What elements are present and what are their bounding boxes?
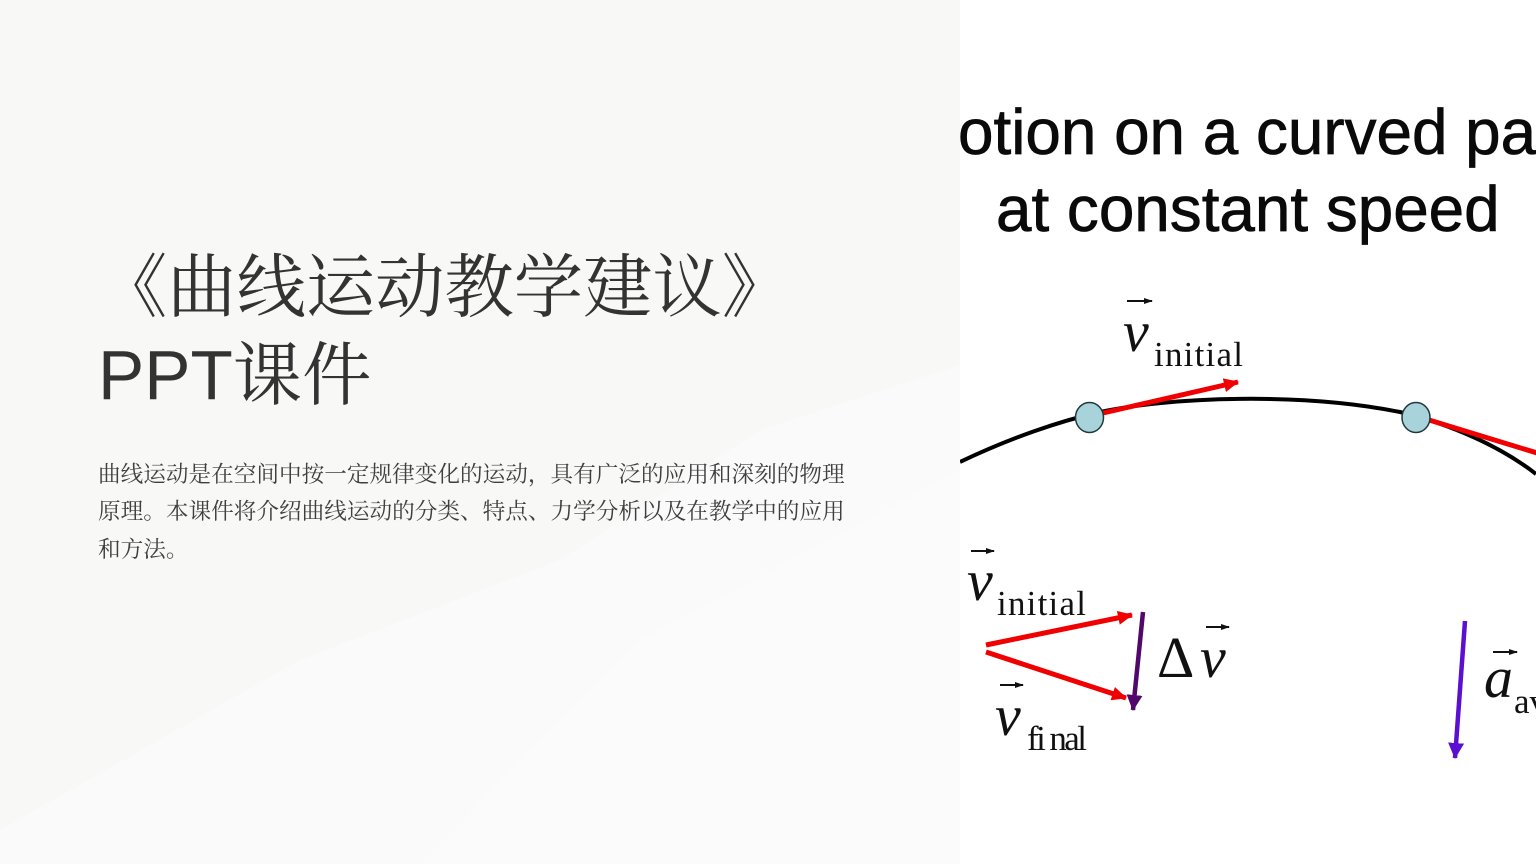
description text: 原理。本课件将介绍曲线运动的分类、特点、力学分析以及在教学中的应用: [98, 499, 845, 524]
label: v final: v: [995, 683, 1021, 748]
label: v initial in triangle: v: [967, 548, 993, 613]
label: a average: a: [1484, 645, 1513, 710]
label: a average: [1484, 645, 1536, 721]
vector triangle: velocity change: [986, 612, 1143, 710]
description text: [98, 462, 845, 562]
label: v initial in triangle: initial: [997, 584, 1086, 623]
label: v initial on path: [1123, 299, 1243, 374]
curved path: [960, 399, 1536, 474]
particle at first position: [1076, 402, 1104, 432]
particle at second position: [1402, 402, 1430, 432]
background: left panel: [0, 0, 960, 864]
label: v initial on path: initial: [1154, 335, 1243, 374]
label: v initial in triangle: [967, 548, 1086, 623]
label: delta v: v: [1200, 625, 1226, 690]
title: PPT课件: [98, 336, 371, 414]
title: [98, 248, 791, 414]
label: v final: fi nal: [1027, 719, 1087, 758]
label: v initial on path: v: [1123, 299, 1149, 364]
description text: 和方法。: [98, 536, 188, 562]
average acceleration arrow: [1455, 621, 1465, 758]
diagram heading: at constant speed: [996, 173, 1500, 245]
final velocity arrow on path: [1416, 416, 1536, 460]
physics diagram: motion on a curved path: [960, 96, 1536, 759]
initial velocity arrow on path: [1090, 382, 1238, 416]
title: 《曲线运动教学建议》: [98, 248, 791, 326]
label: delta v: [1157, 625, 1229, 690]
description text: 曲线运动是在空间中按一定规律变化的运动，具有广泛的应用和深刻的物理: [98, 462, 845, 486]
label: v final: [995, 683, 1087, 758]
label: delta v: Δ: [1157, 625, 1194, 690]
diagram heading: [958, 96, 1536, 245]
